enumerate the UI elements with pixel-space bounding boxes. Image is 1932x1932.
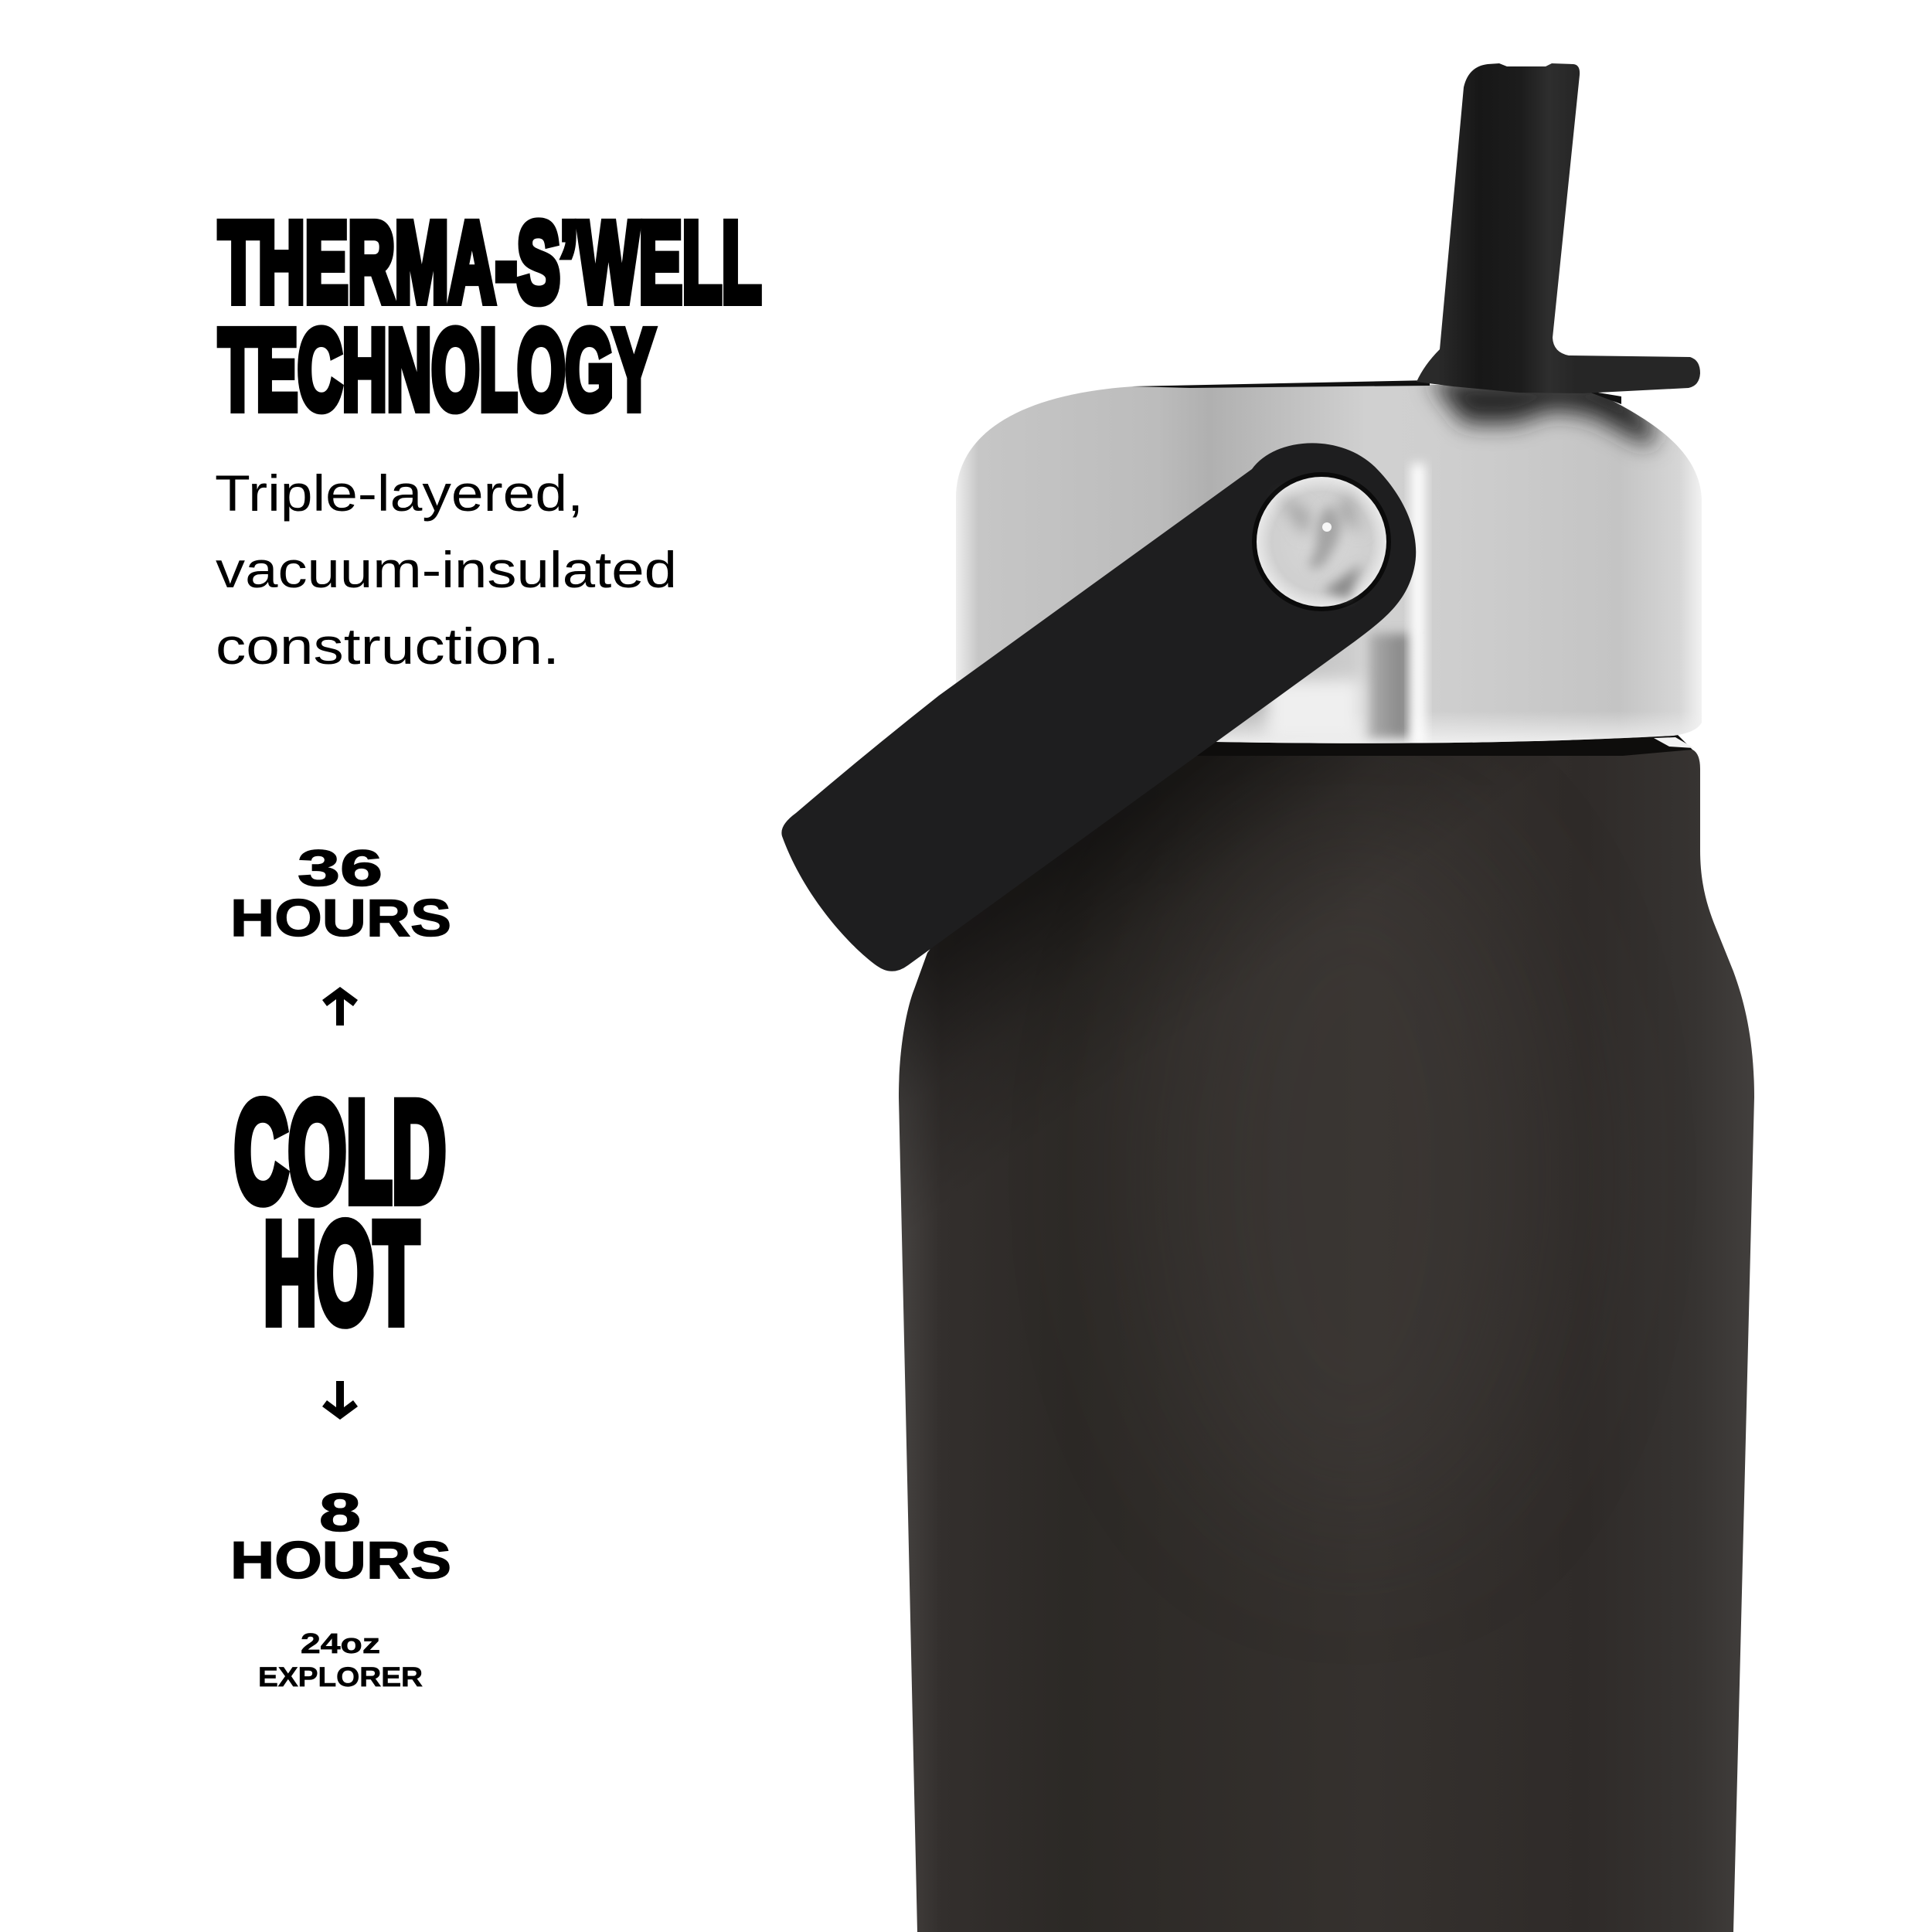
reflection band <box>1362 634 1413 738</box>
arrow up <box>322 987 358 1026</box>
steel lid <box>951 379 1712 750</box>
description text: Triple-layered, <box>215 464 583 522</box>
bottle size label: EXPLORER <box>258 1662 423 1692</box>
description text <box>215 464 677 675</box>
bottle body <box>889 742 1770 1932</box>
lid seal right <box>1584 390 1621 404</box>
bottle size label <box>258 1628 423 1692</box>
rivet <box>1252 472 1391 611</box>
title: THERMA-S’WELL <box>219 199 761 326</box>
straw shadow <box>1430 379 1655 447</box>
straw spout <box>1417 63 1700 393</box>
hot duration: 8 hours <box>230 1482 451 1590</box>
highlight band <box>1411 464 1425 746</box>
cold and hot labels <box>234 1073 446 1353</box>
cold and hot labels: HOT <box>264 1194 419 1353</box>
lid top seal <box>1132 380 1430 388</box>
arrow down <box>322 1381 358 1420</box>
bottle size label: 24oz <box>301 1628 380 1659</box>
cold duration: 36 hours: 36 <box>298 839 383 896</box>
hot duration: 8 hours: HOURS <box>230 1531 451 1590</box>
gasket highlight <box>1654 737 1694 748</box>
glare under handle <box>1267 680 1360 742</box>
cold duration: 36 hours <box>230 839 451 947</box>
hot duration: 8 hours: 8 <box>319 1482 361 1543</box>
cold duration: 36 hours: HOURS <box>230 889 451 947</box>
title <box>219 199 761 434</box>
description text: vacuum-insulated <box>216 541 677 598</box>
description text: construction. <box>216 617 560 675</box>
gasket under lid <box>1190 730 1694 761</box>
title: TECHNOLOGY <box>219 307 655 434</box>
bottle illustration <box>781 63 1770 1932</box>
carry handle <box>781 443 1416 971</box>
cold and hot labels: COLD <box>234 1073 446 1232</box>
